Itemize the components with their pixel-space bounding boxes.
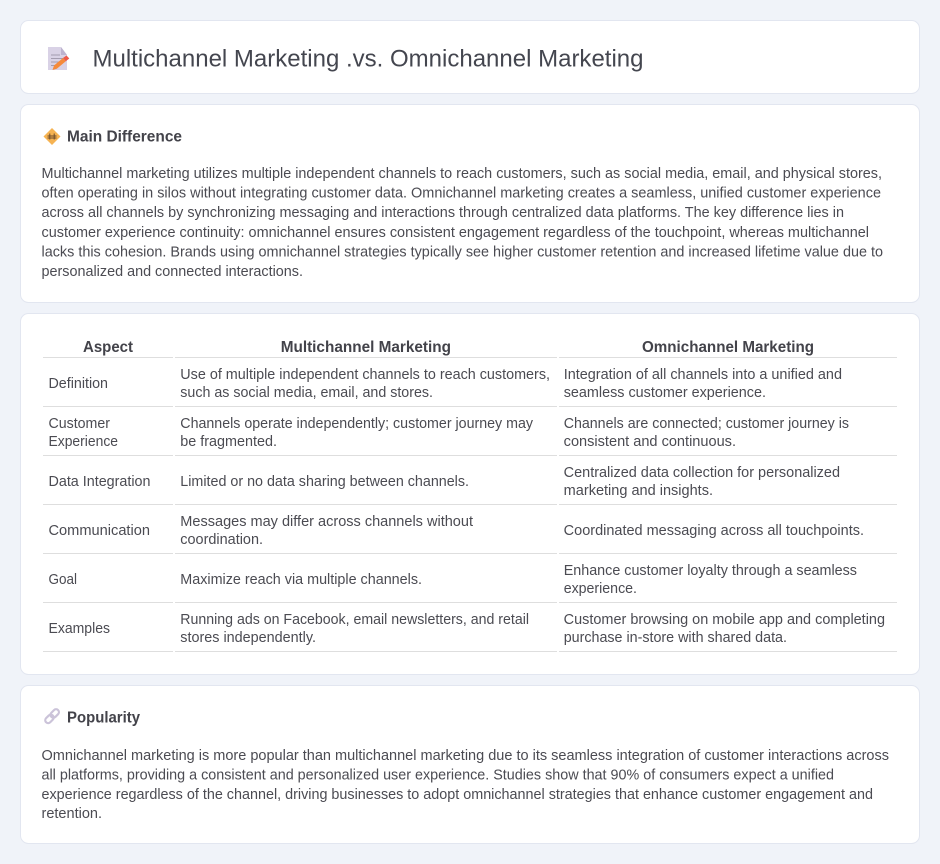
- row: definition: Definition: [48, 376, 108, 392]
- text block: main difference paragraph: Multichannel marketing utilizes multiple independent channels to reach customers, such as social media, email, and physical stores,: [42, 166, 882, 182]
- row: definition: such as social media, email, and stores.: [180, 385, 433, 401]
- row: examples: [48, 612, 885, 646]
- text block: main difference paragraph: lacks this cohesion. Brands using omnichannel strategies typically see higher customer retention and increased lifetime value due to: [42, 244, 883, 260]
- panel: main difference: [20, 104, 920, 302]
- panel: title header: [20, 20, 920, 94]
- icon: chain link: [44, 708, 60, 724]
- row: customer experience: Customer: [48, 416, 110, 432]
- row: examples: Examples: [48, 621, 110, 637]
- row: data integration: marketing and insights.: [564, 483, 713, 499]
- row: data integration: Centralized data collection for personalized: [564, 465, 840, 481]
- table header: Multichannel Marketing: [281, 339, 451, 356]
- row: definition: Use of multiple independent channels to reach customers,: [180, 367, 550, 383]
- row: goal: [48, 563, 857, 597]
- text block: main difference paragraph: personalized and connected interactions.: [42, 264, 303, 280]
- row: customer experience: consistent and continuous.: [564, 434, 736, 450]
- row: goal: Enhance customer loyalty through a seamless: [564, 563, 857, 579]
- icon: diamond sign: [44, 128, 60, 145]
- row: definition: Integration of all channels into a unified and: [564, 367, 842, 383]
- heading: popularity: Popularity: [67, 710, 140, 726]
- row: communication: Communication: [48, 523, 150, 539]
- row: examples: purchase in-store with shared data.: [564, 630, 787, 646]
- row: communication: coordination.: [180, 532, 263, 548]
- text block: main difference paragraph: [42, 166, 883, 280]
- table header: Aspect: [83, 339, 134, 356]
- text block: popularity paragraph: Omnichannel marketing is more popular than multichannel marketing due to its seamless integration of customer interactions across: [42, 748, 889, 764]
- text block: popularity paragraph: retention.: [42, 806, 102, 822]
- row: data integration: Limited or no data sharing between channels.: [180, 474, 469, 490]
- row: definition: [48, 367, 842, 401]
- row: data integration: Data Integration: [48, 474, 150, 490]
- row: examples: Customer browsing on mobile app and completing: [564, 612, 885, 628]
- text block: popularity paragraph: [42, 748, 889, 822]
- row: examples: stores independently.: [180, 630, 316, 646]
- row: communication: Coordinated messaging across all touchpoints.: [564, 523, 864, 539]
- row: communication: [48, 514, 864, 548]
- title: Multichannel Marketing .vs. Omnichannel Marketing: [92, 46, 644, 72]
- row: data integration: [48, 465, 840, 499]
- text block: popularity paragraph: all platforms, providing a consistent and personalized user experience. Studies show that 90% of consumers expect a unified: [42, 768, 834, 784]
- row: customer experience: be fragmented.: [180, 434, 277, 450]
- text block: main difference paragraph: across all channels by synchronizing messaging and interactions through centralized data platforms. The key difference lies in: [42, 205, 844, 221]
- text block: main difference paragraph: often operating in silos without integrating customer data. Omnichannel marketing creates a seamless, unified customer experience: [42, 186, 881, 202]
- panel: comparison table: [20, 314, 920, 674]
- row: customer experience: Channels are connected; customer journey is: [564, 416, 849, 432]
- panel: popularity: [20, 686, 920, 844]
- row: definition: seamless customer experience.: [564, 385, 766, 401]
- row: customer experience: [48, 416, 849, 450]
- text block: popularity paragraph: experience regardless of the channel, driving businesses to adopt omnichannel strategies that enhance customer engagement and: [42, 787, 873, 803]
- row: goal: Goal: [48, 572, 77, 588]
- table header: Omnichannel Marketing: [642, 339, 814, 356]
- table header: [83, 339, 814, 356]
- heading: main difference: Main Difference: [67, 128, 182, 146]
- icon: memo with pencil: [48, 47, 69, 70]
- text block: main difference paragraph: customer experience continuity: omnichannel ensures consistent engagement regardless of the touchpoint, whereas multichannel: [42, 225, 869, 241]
- row: goal: experience.: [564, 581, 637, 597]
- row: customer experience: Experience: [48, 434, 118, 450]
- row: examples: Running ads on Facebook, email newsletters, and retail: [180, 612, 529, 628]
- row: goal: Maximize reach via multiple channels.: [180, 572, 422, 588]
- row: communication: Messages may differ across channels without: [180, 514, 473, 530]
- row: customer experience: Channels operate independently; customer journey may: [180, 416, 534, 432]
